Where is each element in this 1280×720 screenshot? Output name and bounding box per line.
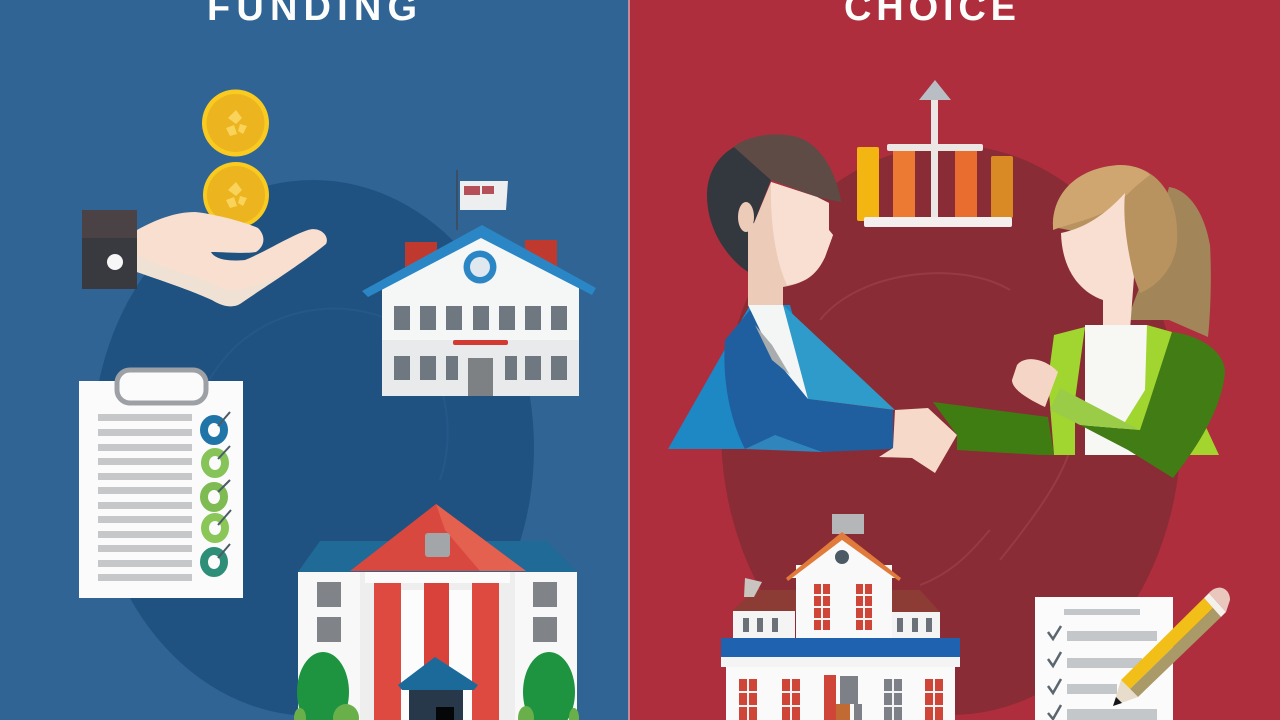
icon: school with flag [362, 170, 596, 396]
figure: man in blue suit [668, 135, 957, 473]
icon: large school [721, 514, 960, 720]
icon: paper checklist with pencil [1035, 588, 1230, 720]
icon: building entrance [398, 657, 478, 720]
icon: bar chart with arrow [857, 80, 1013, 227]
man jacket [668, 305, 895, 452]
icon: coins [202, 90, 269, 228]
icon: clipboard checklist [79, 370, 243, 598]
icon: building trees [294, 652, 579, 720]
pencil [1113, 588, 1230, 706]
woman outfit [933, 325, 1225, 478]
man hair [707, 135, 841, 273]
icon: giving hand [82, 210, 327, 306]
man face [738, 182, 833, 305]
woman fist [1012, 359, 1058, 407]
handshake hand [879, 408, 957, 473]
woman hair [1053, 165, 1211, 337]
figure: woman in green vest [933, 165, 1225, 478]
icon: columned building [294, 504, 579, 720]
woman forearm [933, 402, 1054, 455]
woman face [1061, 193, 1134, 340]
